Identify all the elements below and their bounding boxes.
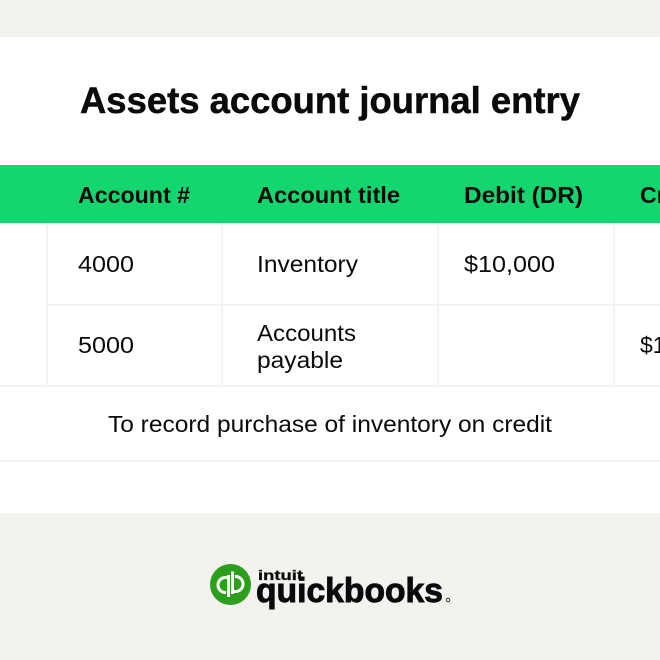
account number 5000: 5000 — [78, 332, 134, 358]
header: account number: Account # — [78, 182, 190, 208]
account number 4000: 4000 — [78, 251, 134, 277]
account title accounts payable: Accounts — [257, 320, 356, 346]
caption row: To record purchase of inventory on credit — [108, 411, 553, 437]
account title inventory: Inventory — [257, 251, 359, 277]
title: Assets account journal entry — [80, 80, 580, 121]
wordmark: quickbooks: quickbooks — [256, 572, 443, 610]
registered mark — [446, 598, 450, 602]
header: debit: Debit (DR) — [464, 182, 583, 208]
header: account title: Account title — [257, 182, 400, 208]
debit amount: $10,000 — [464, 251, 555, 277]
wordmark: intuit: intuit — [258, 567, 303, 583]
panel: white journal entry card — [0, 37, 660, 513]
icon: quickbooks circle — [210, 564, 251, 605]
logo: intuit quickbooks — [210, 564, 450, 610]
table row: accounts payable credit — [78, 320, 660, 373]
account title second line: payable — [257, 347, 343, 373]
table row: inventory debit — [78, 251, 555, 277]
table header band — [0, 165, 660, 223]
